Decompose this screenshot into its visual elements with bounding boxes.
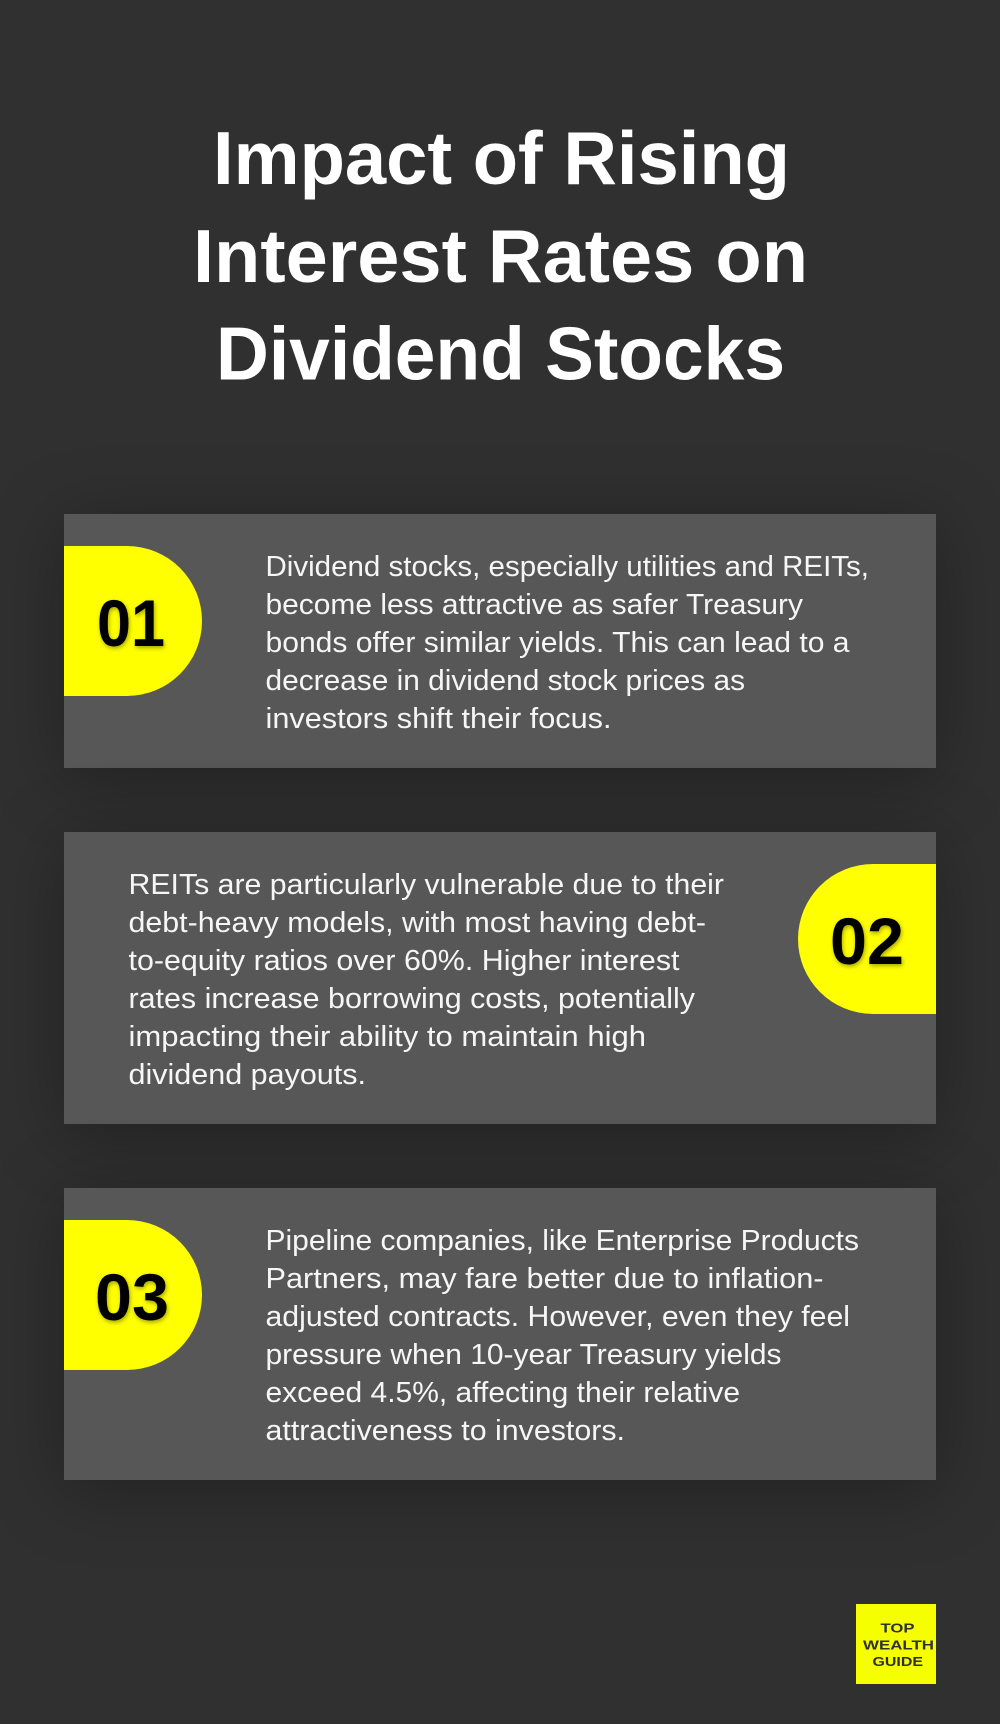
logo: Top Wealth Guide: [856, 1604, 936, 1684]
text: step 02 description: REITs are particularly vulnerable due to their: [128, 869, 724, 901]
text: step 01 description: bonds offer similar yields. This can lead to a: [266, 627, 850, 659]
text: step 01 description: Dividend stocks, especially utilities and REITs,: [266, 551, 869, 583]
title: [193, 116, 808, 396]
text: step 03 description: [266, 1225, 859, 1447]
number badge 03: 03: [95, 1260, 169, 1334]
text: step 03 description: Pipeline companies, like Enterprise Products: [266, 1225, 859, 1257]
text: step 02 description: impacting their ability to maintain high: [128, 1021, 646, 1053]
title: Dividend Stocks: [216, 312, 785, 396]
panel: step 01: [64, 514, 936, 768]
text: step 02 description: to-equity ratios over 60%. Higher interest: [128, 945, 680, 977]
text: step 01 description: investors shift their focus.: [266, 703, 612, 735]
text: step 02 description: [128, 869, 724, 1091]
logo: Top Wealth Guide: WEALTH: [863, 1638, 934, 1652]
number badge 01: 01: [97, 586, 165, 660]
text: step 02 description: rates increase borrowing costs, potentially: [128, 983, 696, 1015]
text: step 02 description: debt-heavy models, with most having debt-: [128, 907, 706, 939]
panel: step 03: [64, 1188, 936, 1480]
logo: Top Wealth Guide: TOP: [880, 1620, 915, 1636]
number badge 03: [64, 1220, 202, 1370]
text: step 01 description: decrease in dividend stock prices as: [266, 665, 745, 697]
text: step 03 description: exceed 4.5%, affecting their relative: [266, 1377, 740, 1409]
text: step 03 description: adjusted contracts. However, even they feel: [266, 1301, 850, 1333]
title: Impact of Rising: [213, 116, 790, 200]
text: step 02 description: dividend payouts.: [128, 1059, 366, 1091]
number badge 02: [798, 864, 936, 1014]
title: Interest Rates on: [193, 214, 808, 298]
text: step 03 description: Partners, may fare better due to inflation-: [266, 1263, 824, 1295]
text: step 03 description: pressure when 10-year Treasury yields: [266, 1339, 782, 1371]
text: step 03 description: attractiveness to investors.: [266, 1415, 625, 1447]
panel: step 02: [64, 832, 936, 1124]
number badge 02: 02: [830, 904, 904, 978]
text: step 01 description: [266, 551, 869, 735]
number badge 01: [64, 546, 202, 696]
logo: Top Wealth Guide: GUIDE: [872, 1654, 923, 1669]
text: step 01 description: become less attractive as safer Treasury: [266, 589, 804, 621]
